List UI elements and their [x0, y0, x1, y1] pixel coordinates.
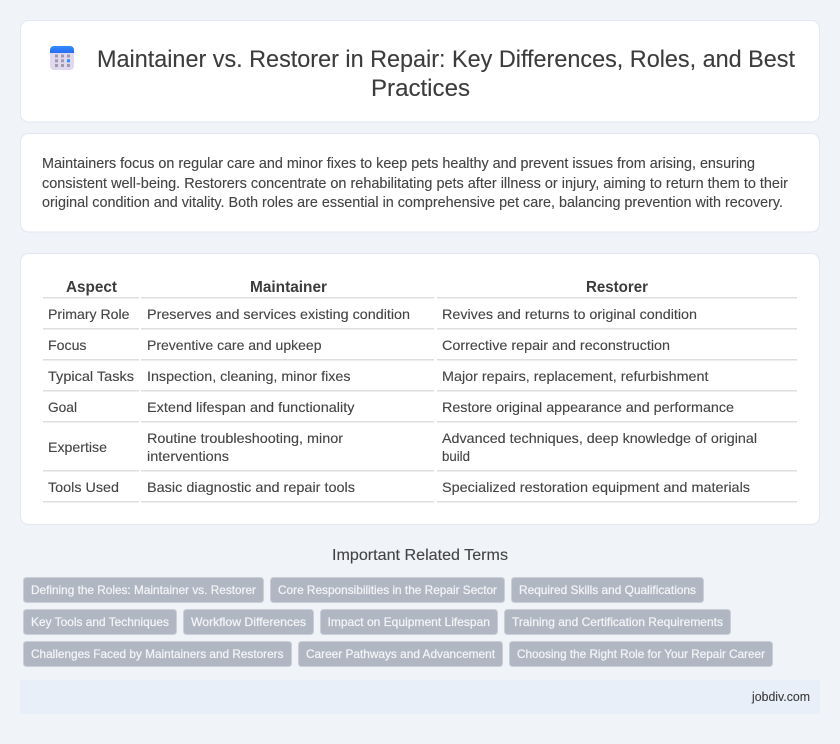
table row: focus [43, 337, 797, 360]
footer: jobdiv.com [751, 689, 810, 704]
panel: header [20, 20, 820, 122]
tag: Required Skills and Qualifications [519, 583, 696, 597]
tag: Career Pathways and Advancement [306, 647, 496, 661]
tag: Choosing the Right Role for Your Repair Career [517, 647, 765, 661]
panel: comparison table [20, 254, 820, 524]
table row: expertise: build [442, 448, 470, 464]
tag: Training and Certification Requirements [512, 615, 723, 629]
table row: tools used: Tools Used [48, 479, 119, 495]
table row: tools used: Basic diagnostic and repair tools [147, 479, 355, 495]
tag [320, 610, 498, 634]
table row: focus: Corrective repair and reconstruction [442, 337, 670, 353]
tag: Impact on Equipment Lifespan [328, 615, 490, 629]
tag [504, 610, 730, 634]
table row: expertise: Expertise [48, 439, 107, 455]
tag: Challenges Faced by Maintainers and Restorers [31, 647, 284, 661]
table row: goal [43, 399, 797, 422]
tag: Defining the Roles: Maintainer vs. Restorer [31, 583, 256, 597]
title: Practices [371, 75, 470, 102]
table row: focus: Focus [48, 337, 86, 353]
table header row: Aspect [66, 279, 118, 296]
table row: expertise [43, 430, 797, 472]
table header row: Maintainer [250, 279, 327, 296]
table row: primary role: Preserves and services existing condition [147, 306, 410, 322]
table row: expertise: Routine troubleshooting, minor [147, 430, 343, 446]
tag: Core Responsibilities in the Repair Sector [278, 583, 497, 597]
text block: introduction: Maintainers focus on regular care and minor fixes to keep pets healthy and prevent issues from arising, ensuring [42, 156, 755, 172]
table row: goal: Extend lifespan and functionality [147, 399, 354, 415]
text block: introduction [42, 156, 788, 211]
table row: typical tasks: Major repairs, replacement, refurbishment [442, 368, 709, 384]
tag: Workflow Differences [191, 615, 306, 629]
tag [24, 578, 264, 602]
table row: expertise: interventions [147, 448, 229, 464]
text block: introduction: consistent well-being. Restorers concentrate on rehabilitating pets after illness or injury, aiming to return them to their [42, 176, 788, 192]
table row: tools used [43, 479, 797, 502]
table header row: Restorer [586, 279, 648, 296]
footer [20, 680, 820, 714]
tag [24, 642, 292, 666]
table row: focus: Preventive care and upkeep [147, 337, 322, 353]
tag [510, 642, 772, 666]
related term tags [24, 578, 772, 666]
tag [512, 578, 704, 602]
title: Maintainer vs. Restorer in Repair: Key Differences, Roles, and Best [97, 46, 795, 73]
table row: typical tasks: Typical Tasks [48, 368, 134, 384]
table row: primary role [43, 306, 797, 330]
table row: primary role: Primary Role [48, 306, 130, 322]
table header row [43, 279, 797, 298]
table row: typical tasks [43, 368, 797, 392]
tag [270, 578, 504, 602]
icon: calendar [50, 46, 74, 70]
table row: typical tasks: Inspection, cleaning, minor fixes [147, 368, 350, 384]
tag [184, 610, 314, 634]
tag: Key Tools and Techniques [31, 615, 169, 629]
heading: important related terms: Important Related Terms [332, 547, 508, 564]
table row: primary role: Revives and returns to original condition [442, 306, 697, 322]
title [97, 46, 795, 102]
text block: introduction: original condition and vitality. Both roles are essential in comprehensive pet care, balancing prevention with recovery. [42, 195, 783, 211]
tag [298, 642, 502, 666]
table row: tools used: Specialized restoration equipment and materials [442, 479, 750, 495]
tag [24, 610, 176, 634]
table row: expertise: Advanced techniques, deep knowledge of original [442, 430, 757, 446]
panel: introduction [20, 134, 820, 232]
table row: goal: Goal [48, 399, 77, 415]
table row: goal: Restore original appearance and performance [442, 399, 734, 415]
